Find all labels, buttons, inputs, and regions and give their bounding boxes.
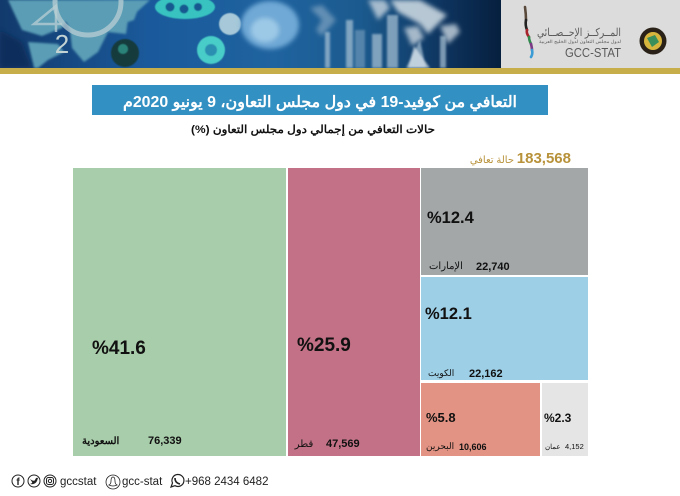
treemap [73, 168, 588, 456]
tile: Oman: 4,152 [565, 442, 584, 451]
tile: Qatar: 47,569 [326, 438, 360, 450]
icon: GCC-STAT ribbon [525, 7, 532, 57]
virus cluster top [111, 0, 241, 67]
total recoveries: حالة تعافي [470, 155, 514, 166]
tile: Oman: %2.3 [544, 411, 572, 425]
header banner [0, 0, 501, 68]
icon: instagram [44, 475, 56, 487]
tile: Qatar [288, 168, 420, 456]
tile: Oman [542, 383, 588, 456]
tile: UAE [421, 168, 588, 275]
tile: Bahrain [421, 383, 540, 456]
gold strip [0, 68, 680, 74]
logo text [537, 27, 622, 60]
subtitle: حالات التعافي من إجمالي دول مجلس التعاون (%) [191, 124, 435, 137]
tile: Kuwait [421, 277, 588, 380]
logo text: لدول مجلس التعاون لدول الخليج العربية [539, 39, 622, 45]
tile: UAE: %12.4 [427, 209, 475, 227]
title bar: التعافي من كوفيد-19 في دول مجلس التعاون، 9 يونيو 2020م [123, 94, 517, 112]
total recoveries: 183,568 [517, 150, 571, 167]
icon: facebook [12, 475, 24, 488]
ring [34, 0, 121, 35]
tile: Bahrain: البحرين [426, 441, 454, 452]
dark ocean shading [0, 30, 32, 68]
logo text: GCC-STAT [565, 46, 621, 60]
tile: Qatar: قطر [294, 439, 313, 450]
logo panel [501, 0, 680, 68]
tile: Kuwait: %12.1 [425, 305, 472, 323]
arrows and skyline [310, 0, 460, 46]
icon: snapchat [106, 475, 120, 489]
handle gccstat: gccstat [60, 476, 97, 488]
social footer [12, 474, 268, 489]
tile: Kuwait: 22,162 [469, 368, 503, 380]
total recoveries [470, 150, 571, 167]
tile: Saudi Arabia [73, 168, 286, 456]
logo text: المــركــز الإحــصــائي [537, 27, 621, 39]
tile: Saudi Arabia: %41.6 [92, 338, 146, 359]
number 2: 2 [55, 29, 69, 59]
tile: Oman: عمان [545, 443, 560, 451]
virus dark [111, 39, 139, 67]
icon: facebook: f [16, 477, 20, 488]
large pale virus [241, 1, 299, 49]
handle gcc-stat: gcc-stat [122, 476, 163, 488]
tile: Bahrain: %5.8 [426, 410, 456, 425]
tile: UAE: الإمارات [429, 261, 463, 272]
icon: GCC emblem [640, 28, 666, 54]
tile: Saudi Arabia: السعودية [82, 436, 120, 447]
icon: whatsapp [171, 474, 184, 487]
icon: twitter [28, 475, 40, 487]
virus cyan [197, 36, 225, 64]
title bar [92, 85, 548, 115]
virus pale small [219, 13, 241, 35]
tile: Kuwait: الكويت [428, 368, 454, 379]
phone number: +968 2434 6482 [185, 476, 268, 488]
tile: Saudi Arabia: 76,339 [148, 435, 182, 447]
tile: UAE: 22,740 [476, 261, 510, 273]
tile: Qatar: %25.9 [297, 335, 351, 356]
world map [8, 0, 150, 68]
tile: Bahrain: 10,606 [459, 442, 487, 452]
